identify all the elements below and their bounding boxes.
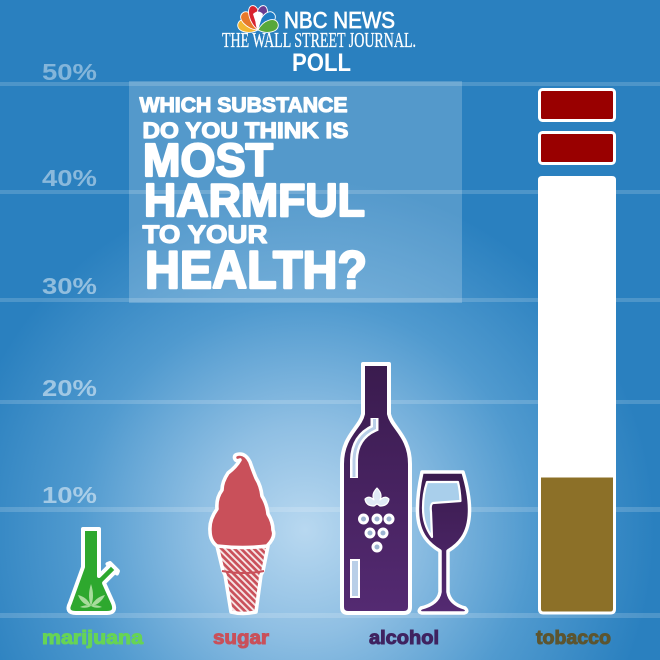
question text: DO YOU THINK IS	[142, 118, 348, 143]
ice cream swirl	[210, 454, 274, 548]
NBC News wordmark: NBC NEWS	[284, 7, 395, 33]
question text: MOST	[143, 134, 273, 186]
question text: TO YOUR	[142, 221, 268, 249]
category labels	[42, 628, 611, 649]
bar segment: white cigarette body	[538, 176, 616, 476]
axis labels	[42, 59, 97, 508]
icon: wine bottle	[342, 364, 410, 613]
axis labels: 50%	[42, 59, 97, 85]
icon: leaf	[78, 584, 105, 608]
category labels: alcohol	[369, 628, 439, 649]
bar: tobacco	[538, 90, 616, 613]
question text: HEALTH?	[145, 241, 367, 300]
question text: WHICH SUBSTANCE	[140, 94, 348, 117]
bottle label bar	[351, 560, 359, 597]
panel: question	[129, 81, 462, 303]
axis labels: 20%	[42, 375, 97, 401]
icon: wine glass	[417, 472, 470, 613]
bar segment: red top	[540, 90, 614, 120]
axis labels: 40%	[42, 165, 97, 191]
axis labels: 30%	[42, 273, 97, 299]
category labels: sugar	[213, 628, 270, 649]
icon: NBC peacock	[236, 4, 280, 36]
header logos	[222, 4, 416, 77]
bottle highlight	[354, 418, 374, 478]
icon: marijuana bong	[68, 529, 118, 613]
question text: HARMFUL	[144, 174, 365, 226]
bar segment: red second	[540, 132, 614, 164]
wine glass highlight	[423, 482, 460, 537]
icon: ice cream cone	[210, 454, 274, 614]
category labels: tobacco	[536, 628, 611, 649]
poll label: POLL	[292, 49, 351, 77]
question text	[140, 94, 367, 300]
bar segment: filter	[540, 476, 614, 613]
Wall Street Journal wordmark: THE WALL STREET JOURNAL.	[222, 28, 416, 52]
category labels: marijuana	[42, 628, 143, 649]
cone rim	[222, 571, 264, 573]
axis labels: 10%	[42, 482, 97, 508]
icon: grapes	[360, 488, 393, 551]
